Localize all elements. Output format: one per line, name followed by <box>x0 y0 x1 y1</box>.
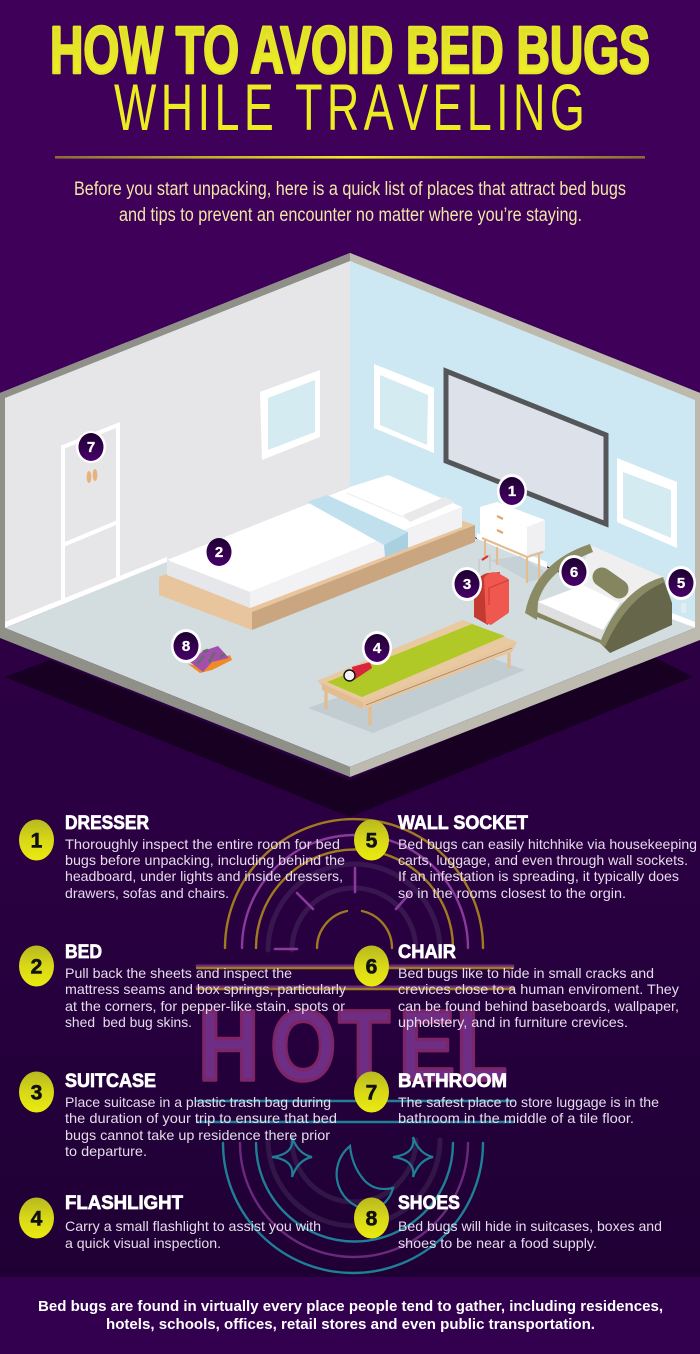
item 8: shoes: Bed bugs will hide in suitcases, boxes and <box>398 1218 662 1234</box>
item 3: suitcase: Place suitcase in a plastic trash bag during <box>65 1094 331 1110</box>
left wall <box>0 253 350 628</box>
marker 7 <box>76 431 106 463</box>
marker 6 <box>559 555 589 589</box>
baseboards <box>5 533 695 628</box>
item 3: suitcase: 3 <box>31 1082 42 1104</box>
item 6: chair: Bed bugs like to hide in small cracks and <box>398 965 654 981</box>
item 5: wall socket <box>354 813 697 901</box>
left wall window <box>260 370 320 460</box>
item 8: shoes <box>354 1193 662 1251</box>
item 6: chair <box>354 942 679 1030</box>
item 4: flashlight: FLASHLIGHT <box>65 1193 183 1214</box>
item 5: wall socket: so in the rooms closest to the orgin. <box>398 885 626 901</box>
item 2: bed: shed bed bug skins. <box>65 1014 192 1030</box>
item 6: chair: 6 <box>366 956 377 978</box>
item 6: chair: CHAIR <box>398 942 456 963</box>
item 1: dresser <box>19 813 345 901</box>
marker 4 <box>362 631 392 665</box>
marker 8: 8 <box>182 638 190 655</box>
item 3: suitcase: to departure. <box>65 1143 147 1159</box>
item 1: dresser: bugs before unpacking, including behind the <box>65 852 345 868</box>
item 3: suitcase: SUITCASE <box>65 1071 156 1092</box>
door <box>63 425 118 602</box>
footer band <box>0 1277 700 1354</box>
marker 2: 2 <box>215 544 223 561</box>
right wall window left <box>374 364 434 453</box>
neon hotel sign <box>197 819 513 1273</box>
item 5: wall socket: carts, luggage, and even through wall sockets. <box>398 852 688 868</box>
chair <box>525 544 672 653</box>
title <box>50 13 650 144</box>
item 4: flashlight: Carry a small flashlight to assist you with <box>65 1218 321 1234</box>
item 8: shoes: shoes to be near a food supply. <box>398 1235 597 1251</box>
wall socket <box>681 603 686 613</box>
item 7: bathroom: BATHROOM <box>398 1071 507 1092</box>
marker 3: 3 <box>463 576 471 593</box>
bench <box>317 620 517 725</box>
right wall window right <box>617 458 677 548</box>
marker 6: 6 <box>570 564 578 581</box>
marker 1 <box>497 474 527 508</box>
door restroom sign <box>87 469 97 483</box>
item 2: bed: BED <box>65 942 102 963</box>
room illustration <box>0 253 700 777</box>
suitcase <box>474 555 509 625</box>
floor shadow <box>5 655 693 817</box>
item 3: suitcase <box>19 1071 337 1159</box>
marker 1: 1 <box>508 483 516 500</box>
item 2: bed: at the corners, for pepper-like stain, spots or <box>65 998 345 1014</box>
shoes <box>188 646 232 673</box>
marker 4: 4 <box>373 640 382 657</box>
item 4: flashlight <box>19 1193 321 1251</box>
marker 8 <box>171 629 201 663</box>
item 5: wall socket: WALL SOCKET <box>398 813 528 834</box>
footer text: Bed bugs are found in virtually every place people tend to gather, including residences, <box>38 1298 663 1315</box>
intro text: and tips to prevent an encounter no matter where you’re staying. <box>119 205 582 226</box>
wall top edges <box>0 253 700 630</box>
wall-mounted tv <box>446 371 606 524</box>
item 8: shoes: 8 <box>366 1208 378 1230</box>
item 3: suitcase: the duration of your trip to ensure that bed <box>65 1110 337 1126</box>
item 6: chair: upholstery, and in furniture crevices. <box>398 1014 628 1030</box>
bench shadow <box>308 650 525 733</box>
item 7: bathroom: 7 <box>366 1082 377 1104</box>
item 1: dresser: headboard, under lights and inside dressers, <box>65 868 343 884</box>
item 7: bathroom <box>354 1071 659 1126</box>
title: WHILE TRAVELING <box>114 70 589 144</box>
dresser <box>480 502 545 583</box>
marker 7: 7 <box>87 439 95 456</box>
item 4: flashlight: a quick visual inspection. <box>65 1235 221 1251</box>
dresser shadow <box>490 556 550 582</box>
item 6: chair: crevices close to a human enviroment. They <box>398 981 679 997</box>
item 1: dresser: DRESSER <box>65 813 149 834</box>
item 2: bed: mattress seams and box springs, particularly <box>65 981 346 997</box>
item 7: bathroom: The safest place to store luggage is in the <box>398 1094 659 1110</box>
item 5: wall socket: Bed bugs can easily hitchhike via housekeeping <box>398 836 697 852</box>
floor <box>5 487 695 767</box>
item 3: suitcase: bugs cannot take up residence there prior <box>65 1127 330 1143</box>
floor slab <box>0 628 700 777</box>
flashlight <box>344 662 372 681</box>
item 8: shoes: SHOES <box>398 1193 460 1214</box>
marker 5 <box>666 566 696 600</box>
item 6: chair: can be found behind baseboards, wallpaper, <box>398 998 679 1014</box>
item 1: dresser: Thoroughly inspect the entire room for bed <box>65 836 340 852</box>
divider <box>55 156 645 159</box>
cushion <box>602 577 619 589</box>
item 2: bed: Pull back the sheets and inspect the <box>65 965 292 981</box>
marker 2 <box>206 538 232 566</box>
item 2: bed <box>19 942 346 1030</box>
pillow <box>347 493 455 522</box>
footer text: hotels, schools, offices, retail stores and even public transportation. <box>106 1316 595 1333</box>
right wall <box>350 253 700 628</box>
bed <box>159 475 475 630</box>
item 2: bed: 2 <box>31 956 42 978</box>
item 4: flashlight: 4 <box>31 1208 43 1230</box>
marker 5: 5 <box>677 575 685 592</box>
item 1: dresser: 1 <box>31 830 43 852</box>
item 7: bathroom: bathroom in the middle of a tile floor. <box>398 1110 634 1126</box>
footer text <box>38 1298 663 1333</box>
intro text <box>74 179 626 226</box>
marker 3 <box>452 567 482 601</box>
neon HOTEL word: HOTEL <box>198 989 508 1102</box>
room markers <box>76 431 696 665</box>
item 5: wall socket: 5 <box>366 830 378 852</box>
item 5: wall socket: If an infestation is spreading, it typically does <box>398 868 679 884</box>
item 1: dresser: drawers, sofas and chairs. <box>65 885 229 901</box>
